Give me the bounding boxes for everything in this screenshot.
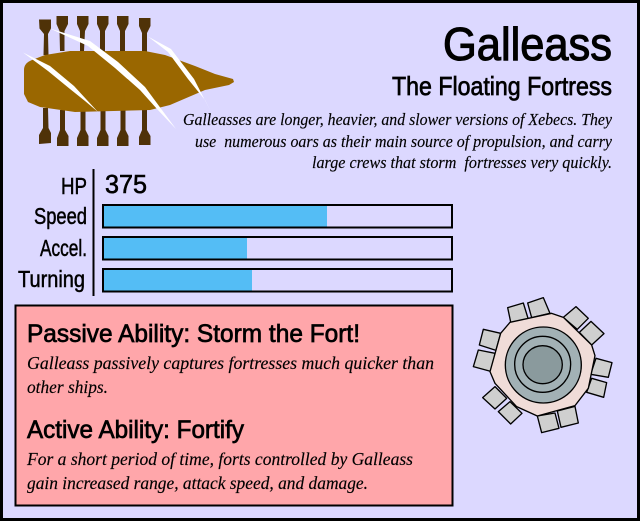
subtitle: The Floating Fortress [392,71,612,101]
oars [39,16,150,146]
bar: turning [103,269,452,292]
fortress base [490,313,595,416]
description: use numerous oars as their main source of propulsion, and carry [195,132,612,151]
inner keep [523,346,562,384]
outer ring [505,327,581,403]
passive text [27,353,434,397]
active text: For a short period of time, forts controlled by Galleass [26,449,413,469]
HP value: 375 [105,169,147,199]
stat labels: Accel. [40,235,87,261]
active text [26,449,413,493]
stat divider [92,169,94,296]
icon: fortress top view [473,298,612,433]
passive text: Galleass passively captures fortresses much quicker than [27,353,434,373]
stat labels: Speed [34,203,87,229]
passive text: other ships. [27,377,108,397]
stat labels [18,173,87,292]
panel: abilities [16,306,452,506]
scratches [23,28,211,129]
active text: gain increased range, attack speed, and damage. [27,473,368,493]
stat labels: Turning [18,266,85,292]
bar: speed [103,205,452,228]
icon: ship top view [23,16,234,146]
hull [24,51,234,112]
description [183,110,612,172]
bar: acceleration [103,237,452,260]
title: Galleass [443,18,612,70]
fortress cannons [473,298,612,433]
description: large crews that storm fortresses very quickly. [312,153,612,172]
passive heading: Passive Ability: Storm the Fort! [27,320,360,348]
active heading: Active Ability: Fortify [27,416,244,444]
description: Galleasses are longer, heavier, and slower versions of Xebecs. They [183,110,612,129]
stat labels: HP [61,173,87,199]
middle ring [515,336,571,392]
